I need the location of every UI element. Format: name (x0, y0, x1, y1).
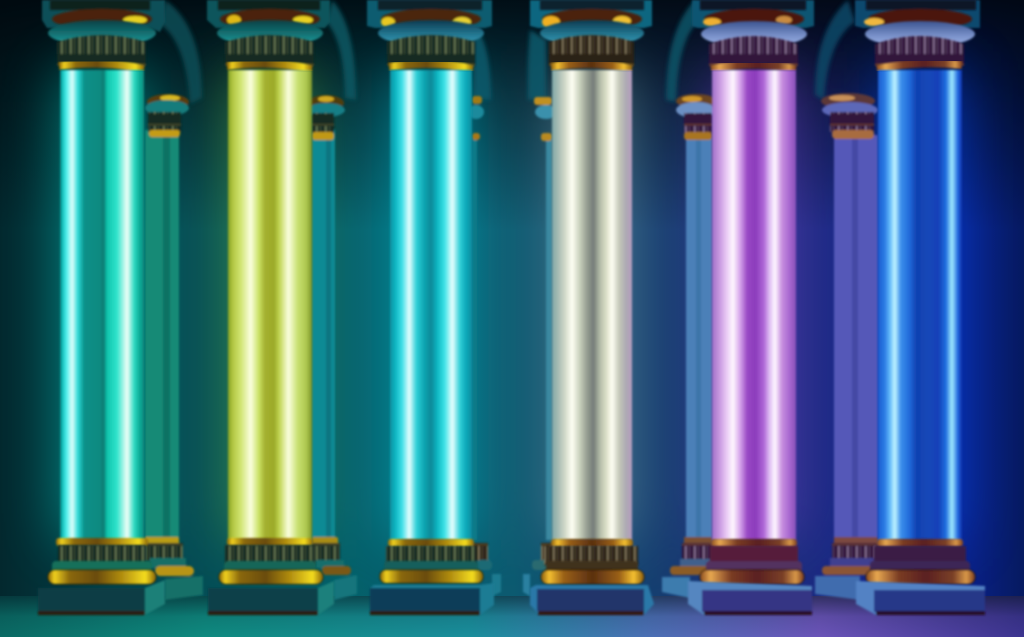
base gold band (551, 539, 633, 547)
abacus (530, 0, 652, 28)
base gold band (227, 538, 313, 546)
column 1: teal (38, 0, 165, 615)
back column 3 (468, 96, 501, 596)
frieze (875, 36, 964, 66)
plinth (856, 581, 985, 615)
back column 6 (815, 93, 878, 600)
abacus (207, 0, 330, 28)
capital gold band (864, 0, 976, 29)
plinth (530, 585, 654, 615)
base torus (219, 570, 323, 584)
plinth (688, 581, 812, 615)
capital lower band (59, 64, 144, 69)
shaft (390, 70, 472, 540)
base gold band (388, 539, 474, 547)
base torus (380, 570, 483, 583)
column 5: violet (688, 0, 814, 615)
column 4: silver white (530, 0, 654, 615)
echinus (540, 20, 644, 46)
base ring (706, 561, 802, 574)
column 2: yellow green (207, 0, 334, 615)
abacus (42, 0, 165, 32)
echinus (865, 21, 975, 47)
column 3: cyan (367, 0, 494, 615)
frieze (549, 35, 634, 66)
base gold band (877, 539, 963, 547)
base frieze (225, 545, 315, 565)
echinus (378, 20, 484, 46)
shaft (552, 70, 632, 540)
floor (0, 596, 1024, 637)
capital lower band (711, 64, 796, 69)
capital gold band (50, 0, 152, 29)
echinus (701, 21, 807, 47)
shaft (60, 70, 144, 540)
frieze (225, 35, 314, 66)
back column 2 (307, 95, 357, 600)
back column 4 (523, 97, 557, 596)
frieze (709, 36, 798, 66)
base gold band (56, 538, 148, 546)
frieze (57, 35, 146, 66)
capital gold band (540, 0, 644, 29)
capital gold band (378, 0, 482, 29)
capital gold band (218, 0, 320, 29)
abacus (367, 0, 492, 28)
base ring (52, 561, 152, 575)
plinth (38, 580, 165, 615)
base ring (224, 561, 316, 575)
base frieze (58, 545, 146, 565)
base ring (384, 561, 478, 575)
base frieze (874, 546, 966, 564)
column glows (60, 70, 962, 540)
arch: back arches behind the columns (160, 0, 855, 104)
base gold band (711, 539, 797, 547)
frieze (387, 35, 475, 66)
abacus (855, 0, 980, 28)
back column 1 (145, 94, 203, 600)
echinus (217, 20, 323, 46)
base torus (48, 570, 156, 584)
base torus (866, 570, 975, 584)
capital lower band (551, 64, 632, 69)
base frieze (710, 546, 798, 564)
capital lower band (227, 64, 312, 69)
shaft (712, 70, 796, 540)
shaft (878, 70, 962, 540)
base torus (541, 570, 644, 584)
plinth (208, 581, 334, 615)
capital lower band (877, 63, 962, 69)
base frieze (386, 546, 476, 565)
capital gold band (700, 0, 806, 29)
back column 5 (662, 94, 716, 598)
capital lower band (389, 64, 473, 69)
base torus (700, 570, 804, 584)
base ring (870, 561, 970, 574)
column 6: blue (855, 0, 985, 615)
base frieze (544, 546, 638, 565)
echinus (48, 20, 156, 46)
shaft (228, 70, 312, 540)
plinth (370, 583, 494, 615)
base ring (546, 561, 638, 575)
abacus (692, 0, 814, 28)
